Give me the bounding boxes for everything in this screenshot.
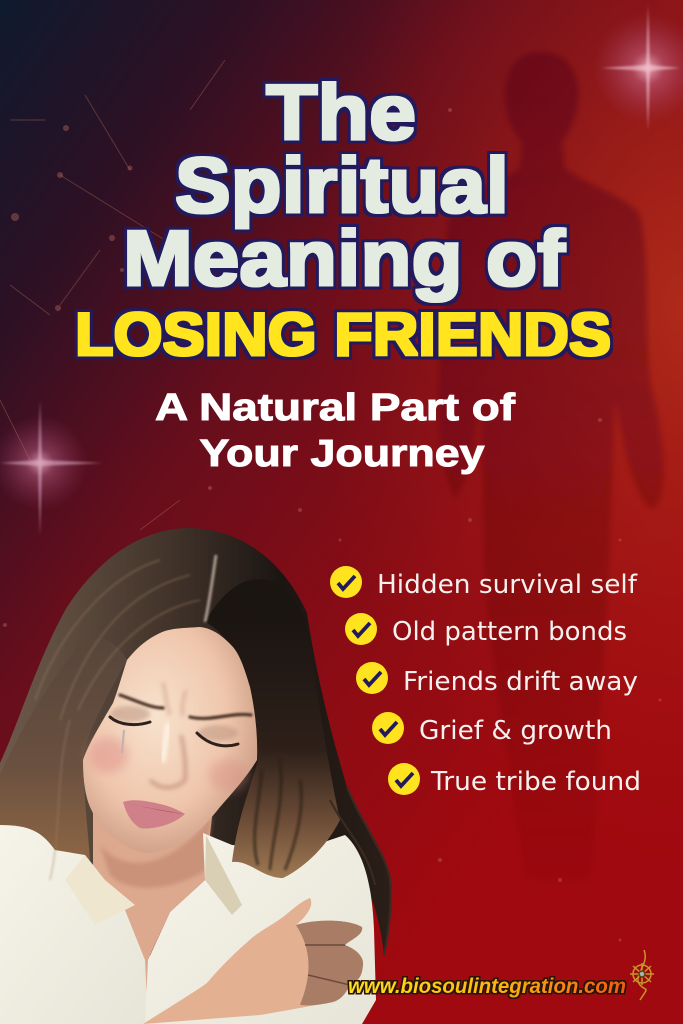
left hair lock [0, 639, 127, 925]
title line: Losing Friends: LOSING FRIENDS [75, 301, 611, 368]
shirt [0, 825, 376, 1024]
title line: The: The [266, 68, 416, 156]
item: True tribe found: True tribe found [430, 767, 641, 797]
checklist [330, 566, 641, 797]
hand on arm [143, 898, 363, 1024]
parting [205, 555, 216, 622]
icon: logo emblem [630, 950, 654, 1000]
subtitle [155, 387, 515, 475]
woman portrait [0, 528, 391, 1024]
title line: Spiritual: Spiritual [175, 141, 509, 229]
star dust [3, 108, 662, 942]
website url: www.biosoulintegration.com [348, 975, 626, 998]
subtitle: A Natural Part of [155, 387, 515, 429]
closed eyes [110, 717, 238, 746]
nose [150, 725, 185, 788]
star: left [0, 400, 102, 536]
hair back [0, 528, 391, 955]
constellation lines [0, 60, 225, 530]
cheek blush [88, 737, 248, 791]
dark strands in right lock [255, 760, 301, 870]
item: Friends drift away: Friends drift away [403, 667, 638, 697]
left hair strands [35, 560, 200, 880]
star: top right [593, 5, 683, 131]
neck and chest [93, 790, 215, 1010]
item: Old pattern bonds: Old pattern bonds [392, 617, 627, 647]
right hair lock [205, 579, 340, 878]
subtitle: Your Journey [200, 433, 484, 475]
item: Hidden survival self: Hidden survival self [377, 570, 638, 600]
neck shadow [100, 815, 212, 888]
lips [123, 800, 185, 828]
right hair wisps [330, 787, 391, 955]
tear [122, 730, 124, 753]
title line: Meaning of: Meaning of [123, 214, 566, 302]
face [83, 627, 257, 853]
brow furrow shading [163, 682, 186, 716]
item: Grief & growth: Grief & growth [419, 716, 612, 746]
eyebrows [120, 695, 251, 718]
eye shadows [110, 706, 238, 741]
title [75, 68, 611, 368]
silhouette of standing figure [438, 52, 664, 880]
